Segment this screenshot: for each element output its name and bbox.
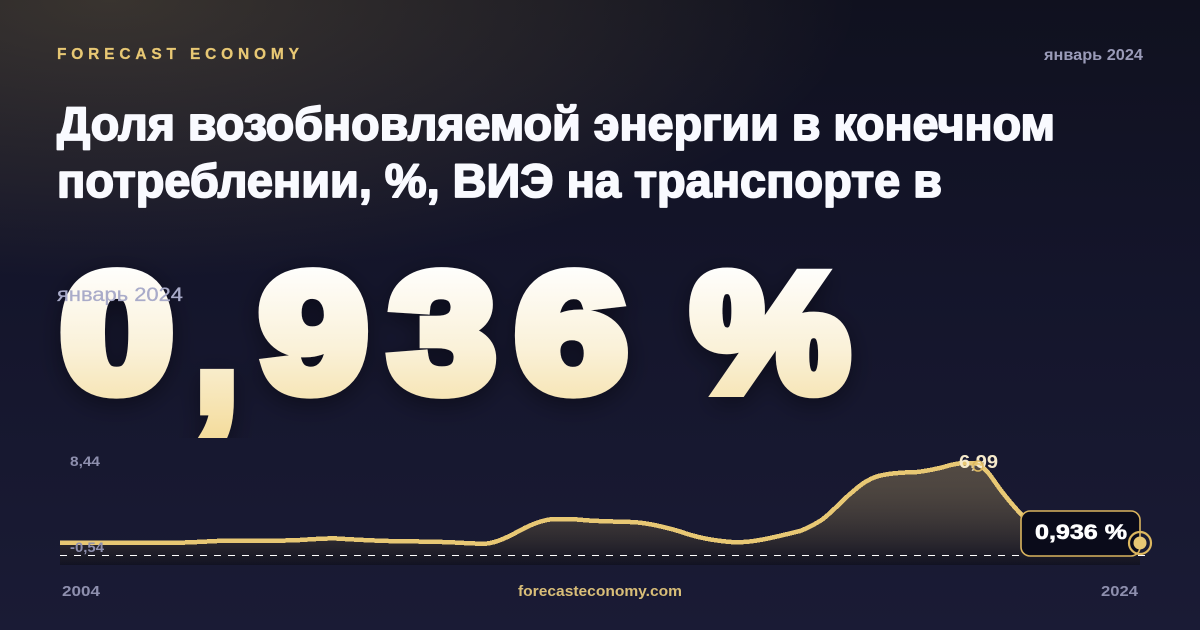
axis max: 8,44 <box>70 453 100 469</box>
big value: 3 <box>390 240 495 425</box>
date top right: январь 2024 <box>1044 47 1143 64</box>
brand label: FORECAST ECONOMY <box>57 46 300 63</box>
title <box>57 97 1055 207</box>
line chart <box>60 452 1151 565</box>
end year: 2024 <box>1101 583 1139 600</box>
big value: , <box>196 228 238 450</box>
chart line <box>60 463 1140 544</box>
baseline <box>60 554 1146 556</box>
value callout: 0,936 % <box>1035 520 1127 544</box>
big value: 6 <box>516 240 627 425</box>
chart area <box>60 463 1140 565</box>
start year: 2004 <box>62 583 101 600</box>
value callout <box>1021 511 1140 556</box>
date over value: январь 2024 <box>57 284 183 306</box>
big value: % <box>692 241 849 426</box>
end marker <box>1129 532 1151 554</box>
big value: 9 <box>260 240 367 426</box>
title: потреблении, %, ВИЭ на транспорте в <box>57 154 942 207</box>
website: forecasteconomy.com <box>518 583 682 600</box>
axis min: -0,54 <box>70 539 104 555</box>
peak value: 6,99 <box>959 452 998 472</box>
big value: 0 <box>61 240 173 426</box>
title: Доля возобновляемой энергии в конечном <box>57 97 1055 150</box>
big value <box>60 267 852 438</box>
peak marker <box>973 461 983 471</box>
